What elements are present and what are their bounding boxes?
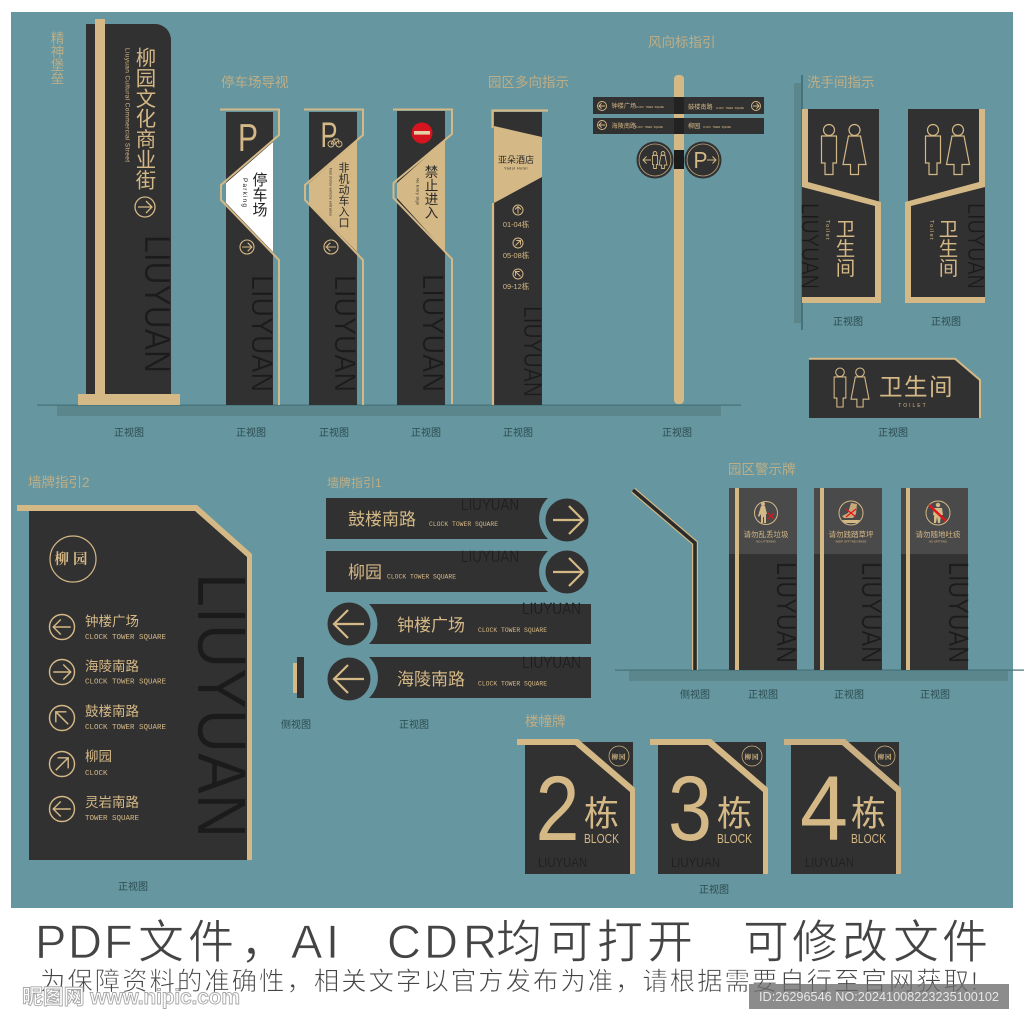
list item 1 bbox=[50, 613, 167, 642]
panel: wall sign row 1: LIUYUAN bbox=[461, 497, 519, 514]
english: Toilet bbox=[824, 220, 830, 241]
panel: wall sign row 4: LIUYUAN bbox=[522, 655, 581, 672]
logo badge bbox=[50, 536, 96, 582]
view labels top: 正视图 bbox=[834, 688, 864, 701]
view labels top: 侧视图 bbox=[281, 718, 311, 731]
list item 3: CLOCK TOWER SQUARE bbox=[85, 724, 167, 732]
ground shadows bbox=[37, 404, 1024, 681]
list item 4: CLOCK bbox=[85, 770, 108, 778]
panel: wall sign row 1 bbox=[326, 497, 588, 542]
view labels top: 正视图 bbox=[920, 688, 950, 701]
list item 3 bbox=[44, 700, 167, 736]
heading: parking: 停车场导视 bbox=[221, 74, 289, 90]
panel: wall sign row 2 bbox=[326, 549, 588, 594]
directory items: 05-08栋 bbox=[503, 251, 530, 260]
footer note: 为保障资料的准确性，相关文字以官方发布为准，请根据需要自行至官网获取! bbox=[40, 968, 978, 996]
panel: building sign 2: 栋 bbox=[584, 795, 619, 834]
view labels top: 正视图 bbox=[748, 688, 778, 701]
direction row 2: CLOCK TOWER SQUARE bbox=[635, 126, 663, 129]
watermark id box: ID:26296546 NO:20241008223235100102 bbox=[759, 990, 999, 1004]
sign english: No Entry Sign bbox=[416, 178, 420, 205]
list item 1: 钟楼广场 bbox=[85, 613, 139, 629]
panel: warning sign 2: 请勿践踏草坪 bbox=[828, 529, 874, 539]
panel: warning sign 2: LIUYUAN bbox=[856, 562, 887, 663]
english: TOILET bbox=[898, 403, 928, 409]
heading: wall sign 2: 墙牌指引2 bbox=[28, 474, 90, 490]
text: 卫生间 bbox=[879, 374, 954, 400]
panel: building sign 4: 4 bbox=[800, 758, 848, 860]
list item 2: 海陵南路 bbox=[85, 659, 139, 674]
panel: building sign 3: LIUYUAN bbox=[671, 855, 720, 870]
list item 5 bbox=[50, 795, 140, 823]
panel: warning sign 1: 请勿乱丢垃圾 bbox=[744, 529, 789, 539]
no entry icon bbox=[412, 122, 432, 144]
view labels top: 正视图 bbox=[878, 426, 908, 439]
panel: wall sign row 3: CLOCK TOWER SQUARE bbox=[478, 627, 547, 634]
directory items: 01-04栋 bbox=[503, 220, 530, 229]
panel: multi direction sign bbox=[492, 110, 548, 405]
view labels top: 正视图 bbox=[699, 883, 729, 896]
footer headline: 文件， bbox=[138, 916, 286, 968]
directory items bbox=[503, 205, 530, 291]
watermark: LIUYUAN bbox=[328, 275, 361, 392]
list item 3: 鼓楼南路 bbox=[85, 704, 139, 719]
panel: warning sign 2: KEEP OFF THE GRASS bbox=[836, 540, 866, 544]
panel: building sign 4: 栋 bbox=[851, 795, 886, 834]
panel: building sign 4: 柳园 bbox=[878, 752, 892, 761]
panel: wall sign row 2: 柳园 bbox=[348, 563, 382, 582]
icon: parking round sign bbox=[684, 142, 722, 178]
text: 卫生间 bbox=[935, 219, 957, 278]
panel: building sign 2 bbox=[517, 739, 635, 874]
icon: keep off grass bbox=[839, 501, 863, 525]
list item 5: TOWER SQUARE bbox=[85, 815, 140, 823]
arrow bbox=[240, 240, 254, 254]
heading: building signs: 楼幢牌 bbox=[525, 713, 566, 729]
direction row 2: 柳园 bbox=[688, 122, 700, 130]
heading: warning signs: 园区警示牌 bbox=[728, 461, 796, 477]
parking english: Parking bbox=[241, 178, 248, 207]
icon: man woman bbox=[834, 368, 869, 407]
sign english: Non motor vehicle entrance bbox=[328, 168, 332, 216]
watermark: LIUYUAN bbox=[416, 274, 449, 392]
panel: wall sign row 1: 鼓楼南路 bbox=[348, 510, 416, 529]
direction row 2: CLOCK TOWER SQUARE bbox=[703, 126, 731, 129]
panel: wall sign row 1: CLOCK TOWER SQUARE bbox=[429, 521, 498, 528]
arrow icon bbox=[135, 197, 155, 217]
icon: parking round sign: P bbox=[694, 147, 708, 173]
panel: warning sign 2 bbox=[814, 488, 887, 670]
direction row 1: CLOCK TOWER SQUARE bbox=[716, 107, 744, 110]
watermark id box bbox=[749, 984, 1009, 1009]
heading: multi direction: 园区多向指示 bbox=[488, 74, 569, 90]
view labels top: 正视图 bbox=[931, 315, 961, 328]
icon: toilet round sign bbox=[636, 142, 674, 178]
heading: direction pole: 风向标指引 bbox=[648, 35, 716, 50]
view labels top: 正视图 bbox=[662, 426, 692, 439]
direction row 1: 鼓楼南路 bbox=[688, 103, 714, 111]
panel: wall sign row 3: LIUYUAN bbox=[522, 601, 581, 618]
icon: man woman bbox=[926, 124, 970, 174]
list item 4: 柳园 bbox=[85, 749, 112, 764]
arrow bbox=[324, 240, 338, 254]
heading: spirit fortress: 精神堡垒 bbox=[48, 31, 64, 85]
direction row 1 bbox=[598, 102, 760, 111]
view labels top bbox=[114, 315, 961, 896]
text: 卫生间 bbox=[832, 219, 854, 278]
watermark: LIUYUAN bbox=[137, 235, 178, 373]
parking text: 停车场 bbox=[250, 172, 268, 218]
hotel name: 亚朵酒店 bbox=[498, 154, 534, 165]
panel: warning sign 3: LIUYUAN bbox=[943, 562, 974, 663]
bike icon bbox=[328, 139, 342, 147]
watermark: LIUYUAN bbox=[962, 203, 989, 289]
panel: warning sign 3 bbox=[901, 488, 974, 670]
totem subtitle: Liuyuan Cultural Commercial Street bbox=[124, 48, 130, 162]
panel: parking sign bbox=[220, 110, 279, 405]
panel: building sign 2: 2 bbox=[536, 758, 580, 860]
panel: restroom horizontal sign bbox=[809, 358, 980, 418]
view labels top: 正视图 bbox=[236, 426, 266, 439]
heading: restroom: 洗手间指示 bbox=[807, 75, 874, 90]
totem title: 柳园文化商业街 bbox=[132, 47, 156, 190]
view labels top: 正视图 bbox=[319, 426, 349, 439]
wall sign side view bbox=[293, 657, 304, 698]
panel: warning sign 3: 请勿随地吐痰 bbox=[916, 529, 961, 539]
hotel english: Yadol Hotel bbox=[504, 166, 528, 170]
logo badge: 柳园 bbox=[54, 548, 92, 569]
panel: direction pole sign bbox=[593, 75, 764, 404]
P icon: P bbox=[320, 116, 338, 155]
panel: warning sign 1: LIUYUAN bbox=[771, 562, 802, 663]
panel: wall sign row 3 bbox=[328, 601, 591, 646]
watermark: LIUYUAN bbox=[245, 275, 278, 392]
pole clamp bbox=[674, 150, 684, 169]
panel: building sign 3: BLOCK bbox=[717, 832, 753, 846]
panel: building sign 3 bbox=[650, 739, 768, 874]
list item 5: 灵岩南路 bbox=[85, 795, 139, 810]
restroom wall line bbox=[794, 75, 803, 330]
sign text: 非机动车入口 bbox=[337, 162, 350, 228]
panel: wall sign 2 bbox=[17, 505, 260, 860]
panel: wall sign row 4 bbox=[328, 655, 591, 700]
watermark: LIUYUAN bbox=[518, 306, 546, 397]
watermark logo: 昵图网 www.nipic.com bbox=[22, 986, 240, 1009]
panel: building sign 2: LIUYUAN bbox=[538, 855, 587, 870]
panel: building sign 4: BLOCK bbox=[851, 832, 887, 846]
panel: building sign 2: 柳园 bbox=[612, 752, 626, 761]
icon: man woman bbox=[822, 124, 866, 174]
view labels top: 正视图 bbox=[118, 880, 148, 893]
watermark: LIUYUAN bbox=[183, 573, 260, 838]
panel: wall sign row 2: CLOCK TOWER SQUARE bbox=[387, 574, 456, 580]
panel: wall sign row 2: LIUYUAN bbox=[461, 549, 519, 566]
panel: wall sign row 3: 钟楼广场 bbox=[397, 616, 465, 635]
direction row 2 bbox=[598, 120, 731, 130]
view labels top: 正视图 bbox=[114, 426, 144, 439]
direction row 1: 钟楼广场 bbox=[612, 102, 636, 110]
panel: restroom sign right bbox=[905, 109, 989, 303]
panel: building sign 3: 柳园 bbox=[744, 752, 760, 761]
panel: warning sign 1: NO LITTERING bbox=[756, 540, 776, 544]
view labels top: 正视图 bbox=[503, 426, 533, 439]
list item 2 bbox=[50, 659, 167, 686]
panel: wall sign row 4: CLOCK TOWER SQUARE bbox=[478, 680, 547, 688]
panel: non motor parking sign bbox=[304, 110, 363, 405]
view labels top: 正视图 bbox=[833, 315, 863, 328]
sign text: 禁止进入 bbox=[422, 165, 438, 219]
panel: building sign 4: LIUYUAN bbox=[805, 855, 854, 870]
panel: building sign 2: BLOCK bbox=[584, 832, 620, 846]
footer headline: 均可打开可修改文件 bbox=[496, 916, 988, 968]
list item 2: CLOCK TOWER SQUARE bbox=[85, 678, 167, 686]
list item 4 bbox=[44, 746, 112, 782]
view labels top: 正视图 bbox=[411, 426, 441, 439]
direction row 2: 海陵南路 bbox=[612, 122, 637, 130]
panel: restroom sign left bbox=[796, 109, 881, 303]
icon: no spitting bbox=[926, 501, 950, 525]
panel: warning sign 1 bbox=[729, 488, 802, 670]
view labels top: 侧视图 bbox=[680, 688, 710, 701]
english: Toilet bbox=[928, 220, 934, 241]
icon: no littering bbox=[754, 502, 778, 524]
parking P: P bbox=[238, 117, 258, 160]
direction row 1: CLOCK TOWER SQUARE bbox=[636, 106, 664, 109]
view labels top: 正视图 bbox=[399, 718, 429, 731]
warning sign side view bbox=[633, 490, 695, 670]
panel: building sign 4 bbox=[784, 739, 901, 874]
footer headline: PDF bbox=[35, 915, 133, 968]
panel: warning sign 3: NO SPITTING bbox=[929, 540, 947, 544]
panel: wall sign row 4: 海陵南路 bbox=[397, 670, 465, 689]
panel: building sign 3: 栋 bbox=[717, 795, 752, 834]
panel: main totem sign bbox=[78, 19, 180, 405]
panel: building sign 3: 3 bbox=[668, 758, 712, 860]
list item 1: CLOCK TOWER SQUARE bbox=[85, 634, 167, 642]
heading: wall sign 1: 墙牌指引1 bbox=[327, 475, 382, 490]
directory items: 09-12栋 bbox=[503, 282, 530, 291]
footer headline: AICDR bbox=[291, 915, 497, 968]
watermark: LIUYUAN bbox=[796, 203, 823, 289]
panel: no entry sign bbox=[393, 110, 452, 405]
